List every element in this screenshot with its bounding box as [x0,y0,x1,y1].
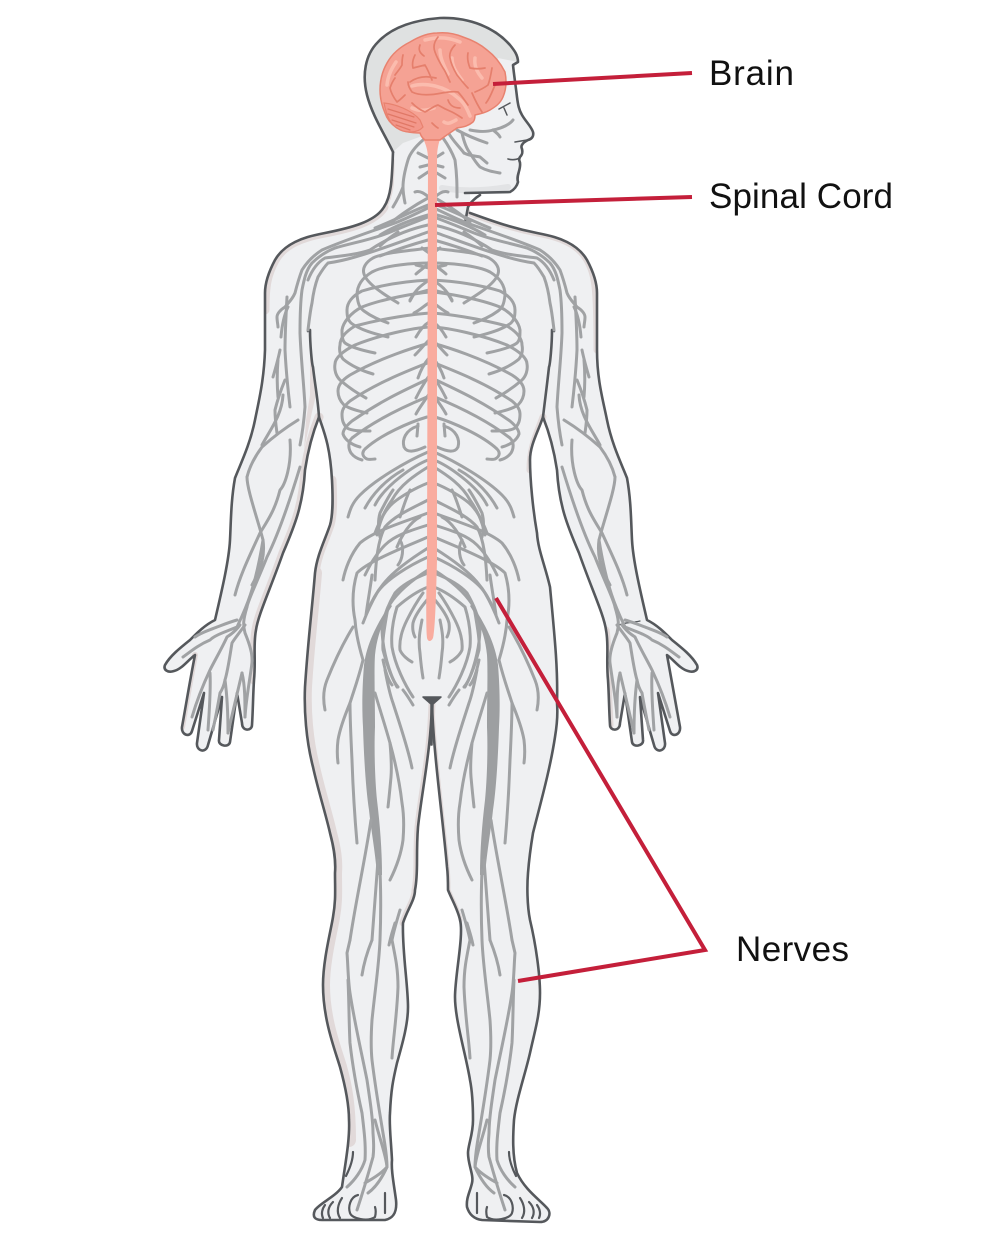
nostril and lip lines [508,140,527,160]
human body figure [165,18,697,1222]
lower leg nerves [347,923,398,1210]
cerebrum [380,33,506,140]
gyri [390,37,495,128]
neck and face nerves [375,120,513,235]
torso armpit lines [308,330,554,417]
peripheral nerves: right half [432,208,679,1220]
head outline [365,18,533,223]
eye [499,103,510,115]
brain [380,33,506,140]
cerebellum [384,103,423,132]
hair [365,18,518,152]
abdominal nerves [343,452,428,697]
crotch mark [423,697,441,745]
rib nerves [335,248,430,460]
body silhouette fill [165,150,697,1222]
sciatic trunk [362,604,392,875]
body edge shading [182,160,610,1140]
label line: spinal cord [435,197,692,205]
wrist crease [617,621,640,626]
label line: nerves bracket [496,598,705,981]
jaw shadow [442,187,508,190]
brain highlights [387,38,482,123]
label: Brain: Brain [709,54,794,93]
shoulder and arm nerves [183,208,428,733]
body outline [165,152,697,1222]
head and neck fill [365,18,533,222]
label: Nerves: Nerves [736,930,849,969]
cerebellum folds [388,109,416,130]
armpit shading [304,340,316,450]
label: Spinal Cord: Spinal Cord [709,177,893,216]
peripheral nerves: left half [183,208,430,1220]
label line: brain [493,73,692,84]
spinal cord [422,136,441,641]
thigh nerves [324,627,413,940]
foot toe lines [322,1152,385,1220]
